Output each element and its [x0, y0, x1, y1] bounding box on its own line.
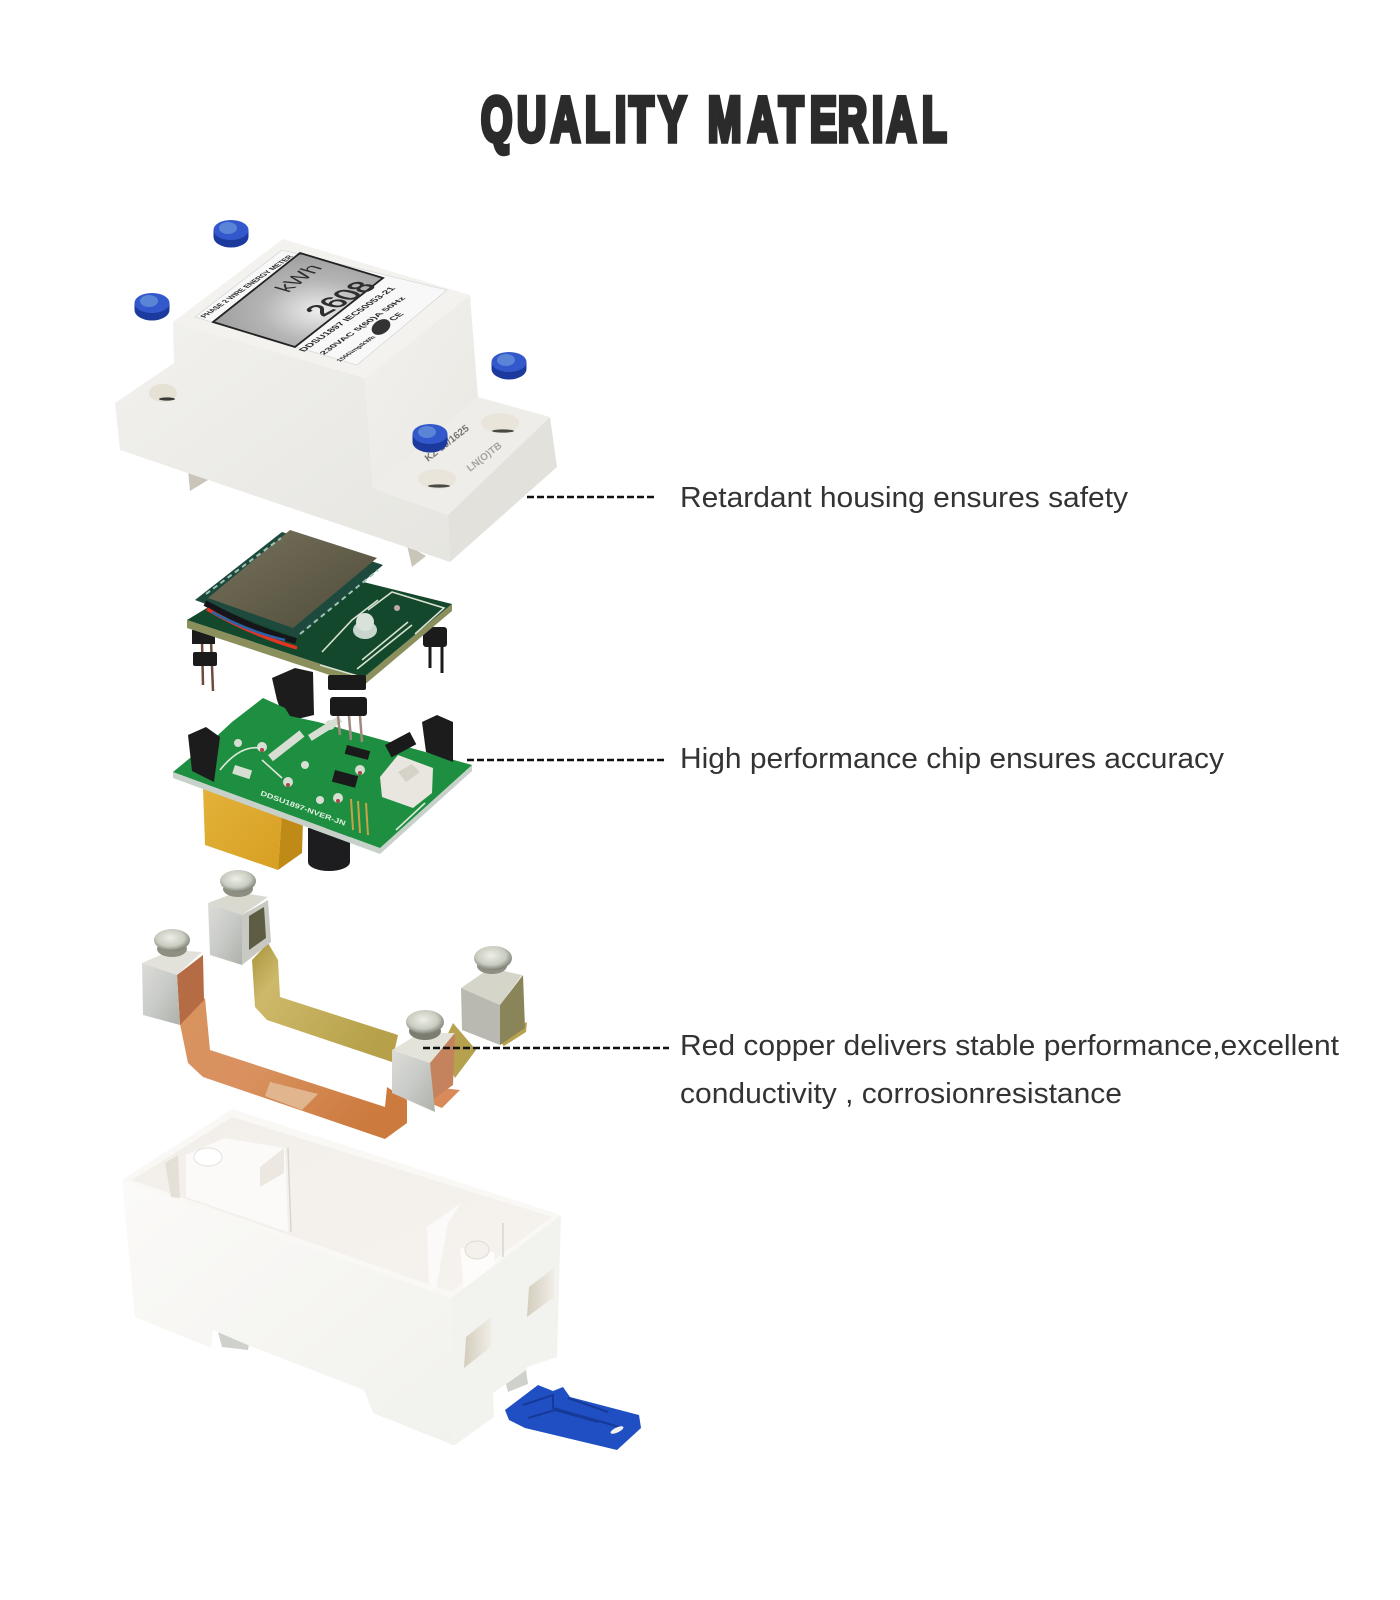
terminal rear right [461, 946, 527, 1046]
callout text: Red copper delivers stable performance,excellent [680, 1030, 1339, 1062]
moulded flange marks: LN(O)TB [465, 440, 504, 474]
faceplate printed text [198, 254, 408, 363]
exploded part: main circuit board [173, 668, 472, 871]
copper front tab [432, 1087, 460, 1108]
capacitor [308, 828, 350, 871]
gold pins [351, 799, 368, 835]
faceplate printed text: CE [386, 312, 406, 322]
back header [272, 668, 314, 722]
LCD reading [269, 262, 384, 319]
exploded part: conductor bars and terminals [142, 870, 527, 1139]
title: QUALITY MATERIAL [481, 85, 947, 155]
blue caps [134, 220, 526, 452]
metal clips [218, 1332, 528, 1392]
moulded flange marks: KZ-10/1625 [423, 423, 472, 464]
callout: copper [423, 1030, 1339, 1110]
housing right flange top [373, 397, 550, 515]
display module frame [195, 532, 383, 638]
display glass [208, 530, 377, 628]
leader line [527, 496, 654, 498]
faceplate printed text: DDSU1897 IEC50053-21 [296, 286, 398, 353]
faceplate printed text: 230VAC 5(60)A 50Hz [317, 296, 408, 356]
yellow relay [203, 788, 303, 870]
board silkscreen text: DDSU1897-NVER-JN [259, 790, 346, 828]
exploded part: display circuit board [187, 530, 452, 691]
housing right flange side [448, 417, 557, 562]
ribbon wires [205, 603, 297, 648]
indicator LED [369, 316, 393, 338]
LCD reading: kWh [269, 262, 328, 294]
board edge [187, 604, 452, 686]
flange mounting holes [149, 384, 519, 489]
leader line [467, 759, 667, 761]
callout text: conductivity , corrosionresistance [680, 1078, 1122, 1110]
board surface [173, 698, 472, 848]
white connector [380, 755, 433, 808]
terminal front right [392, 1010, 455, 1112]
interior left pillars [165, 1138, 291, 1232]
faceplate printed text: 1500imp/kWh [335, 336, 378, 363]
brass rear tab [440, 1023, 476, 1078]
board surface [187, 562, 452, 678]
blue locking clip [505, 1385, 641, 1450]
case side window upper [527, 1268, 554, 1317]
terminal rear left [208, 870, 271, 965]
callout text: High performance chip ensures accuracy [680, 743, 1225, 775]
copper bar [180, 998, 407, 1139]
callout text: Retardant housing ensures safety [680, 482, 1129, 514]
moulded flange marks [423, 423, 504, 474]
LCD reading: 2608 [298, 279, 384, 319]
exploded part: bottom case [122, 1109, 561, 1445]
case front face [122, 1180, 453, 1445]
housing top face [173, 239, 470, 378]
case right face [451, 1215, 561, 1445]
board edge [173, 765, 472, 854]
case interior [132, 1117, 552, 1292]
left header [188, 727, 220, 782]
center header joining the boards [328, 675, 367, 742]
housing front body [115, 322, 450, 562]
faceplate label [195, 250, 447, 365]
case rim [122, 1109, 561, 1298]
board components [220, 716, 425, 830]
right header [422, 715, 453, 762]
housing right upper face [365, 295, 478, 488]
interior right pillars [427, 1203, 503, 1293]
brass bar [252, 943, 398, 1062]
housing feet [188, 470, 426, 567]
terminal front left [142, 929, 204, 1025]
pad [394, 605, 400, 611]
leader line [423, 1047, 669, 1049]
LCD window [213, 253, 383, 347]
board pins [192, 627, 447, 691]
display contacts [206, 538, 378, 634]
board silkscreen [320, 592, 444, 676]
faceplate printed text: PHASE 2 WIRE ENERGY METER [198, 254, 296, 319]
LED [353, 613, 377, 639]
exploded part: top housing [115, 239, 557, 567]
copper bar joint [265, 1082, 318, 1110]
case side window lower [464, 1317, 491, 1368]
